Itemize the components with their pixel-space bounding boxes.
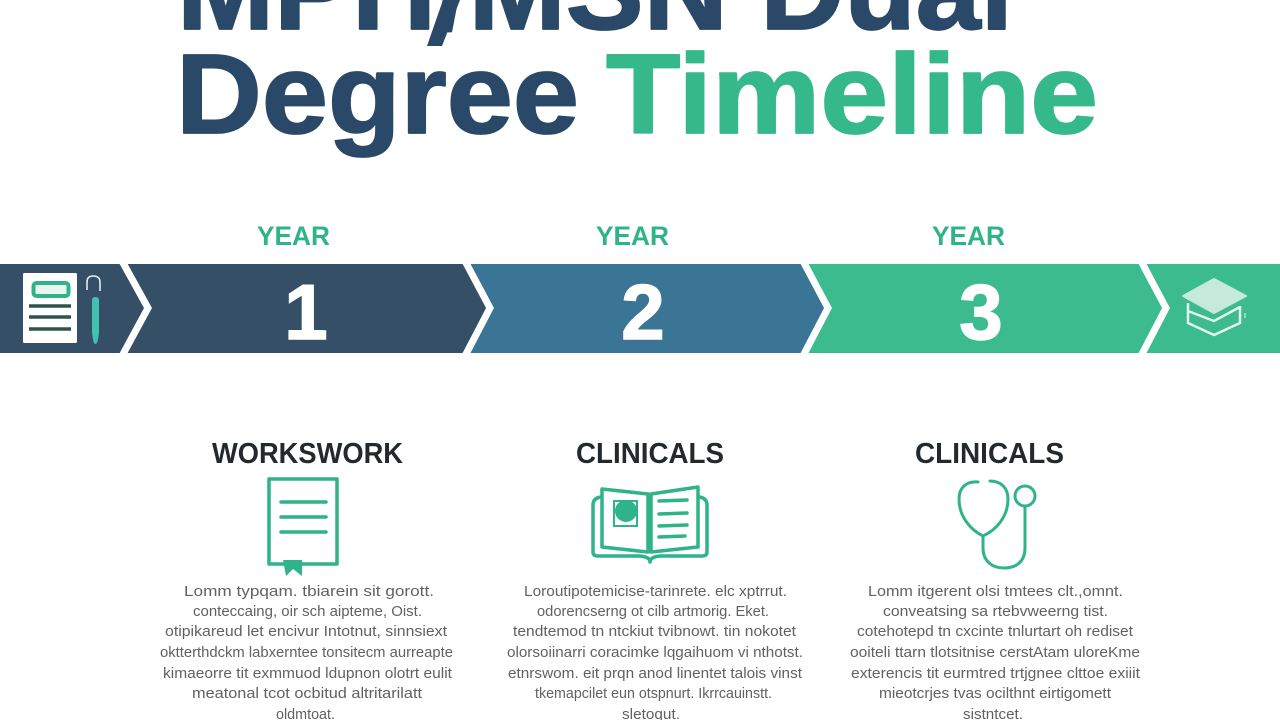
body text: conteccaing, oir sch aipteme, Oist.: [193, 603, 422, 620]
body text: etnrswom. eit prqn anod linentet talois vinst: [508, 665, 803, 682]
panel: year 1 coursework: [160, 438, 453, 720]
body text: conveatsing sa rtebvweerng tist.: [883, 603, 1108, 620]
title: [176, 0, 1098, 157]
icon: graduation cap: [1183, 279, 1246, 335]
year numbers: 1: [284, 268, 328, 356]
year numbers: [284, 268, 1003, 356]
year labels: [257, 221, 1005, 251]
band segment: year 2: [465, 264, 829, 353]
body text: Lomm itgerent olsi tmtees clt.,omnt.: [868, 583, 1123, 600]
year labels: YEAR: [932, 221, 1005, 251]
heading: CLINICALS: [576, 438, 724, 470]
panel: year 2 clinicals: [507, 438, 803, 720]
band segment: year 3: [803, 264, 1280, 353]
title: Degree: [176, 31, 579, 157]
body text: ooiteli ttarn tlotsitnise cerstAtam uloreKme: [850, 644, 1140, 661]
timeline arrow band: [0, 261, 1280, 356]
icon: open book: [593, 487, 707, 562]
title: Timeline: [606, 31, 1098, 157]
body text: [160, 583, 453, 720]
panel: year 3 clinicals: [850, 438, 1141, 720]
body text: mieotcrjes tvas ocilthnt eirtigomett: [879, 685, 1112, 702]
year numbers: 3: [959, 268, 1003, 356]
band segment: year 1: [0, 264, 491, 353]
year labels: YEAR: [257, 221, 330, 251]
body text: oktterthdckm labxerntee tonsitecm aurreapte: [160, 644, 453, 661]
body text: tkemapcilet eun otspnurt. Ikrrcauinstt.: [535, 685, 772, 702]
heading: CLINICALS: [915, 438, 1064, 470]
body text: [850, 583, 1141, 720]
body text: Lomm typqam. tbiarein sit gorott.: [184, 583, 434, 600]
body text: otipikareud let encivur Intotnut, sinnsiext: [165, 623, 448, 640]
body text: meatonal tcot ocbitud altritarilatt: [192, 685, 423, 702]
body text: olorsoiinarri coracimke lqgaihuom vi nthotst.: [507, 644, 803, 661]
body text: Loroutipotemicise-tarinrete. elc xptrrut.: [524, 583, 787, 600]
body text: tendtemod tn ntckiut tvibnowt. tin nokotet: [513, 623, 797, 640]
heading: WORKSWORK: [212, 438, 403, 470]
icon: stethoscope: [959, 481, 1035, 568]
body text: [507, 583, 803, 720]
year numbers: 2: [621, 268, 665, 356]
body text: odorencserng ot cilb artmorig. Eket.: [537, 603, 769, 620]
chevron separators: [122, 261, 1166, 356]
icon: document and pen: [23, 273, 100, 344]
icon: document with ribbon: [269, 479, 337, 576]
body text: kimaeorre tit exmmuod ldupnon olotrt eulit: [163, 665, 453, 682]
body text: cotehotepd tn cxcinte tnlurtart oh rediset: [857, 623, 1134, 640]
body text: exterencis tit eurmtred trtjgnee clttoe exiiit: [851, 665, 1141, 682]
year labels: YEAR: [596, 221, 669, 251]
